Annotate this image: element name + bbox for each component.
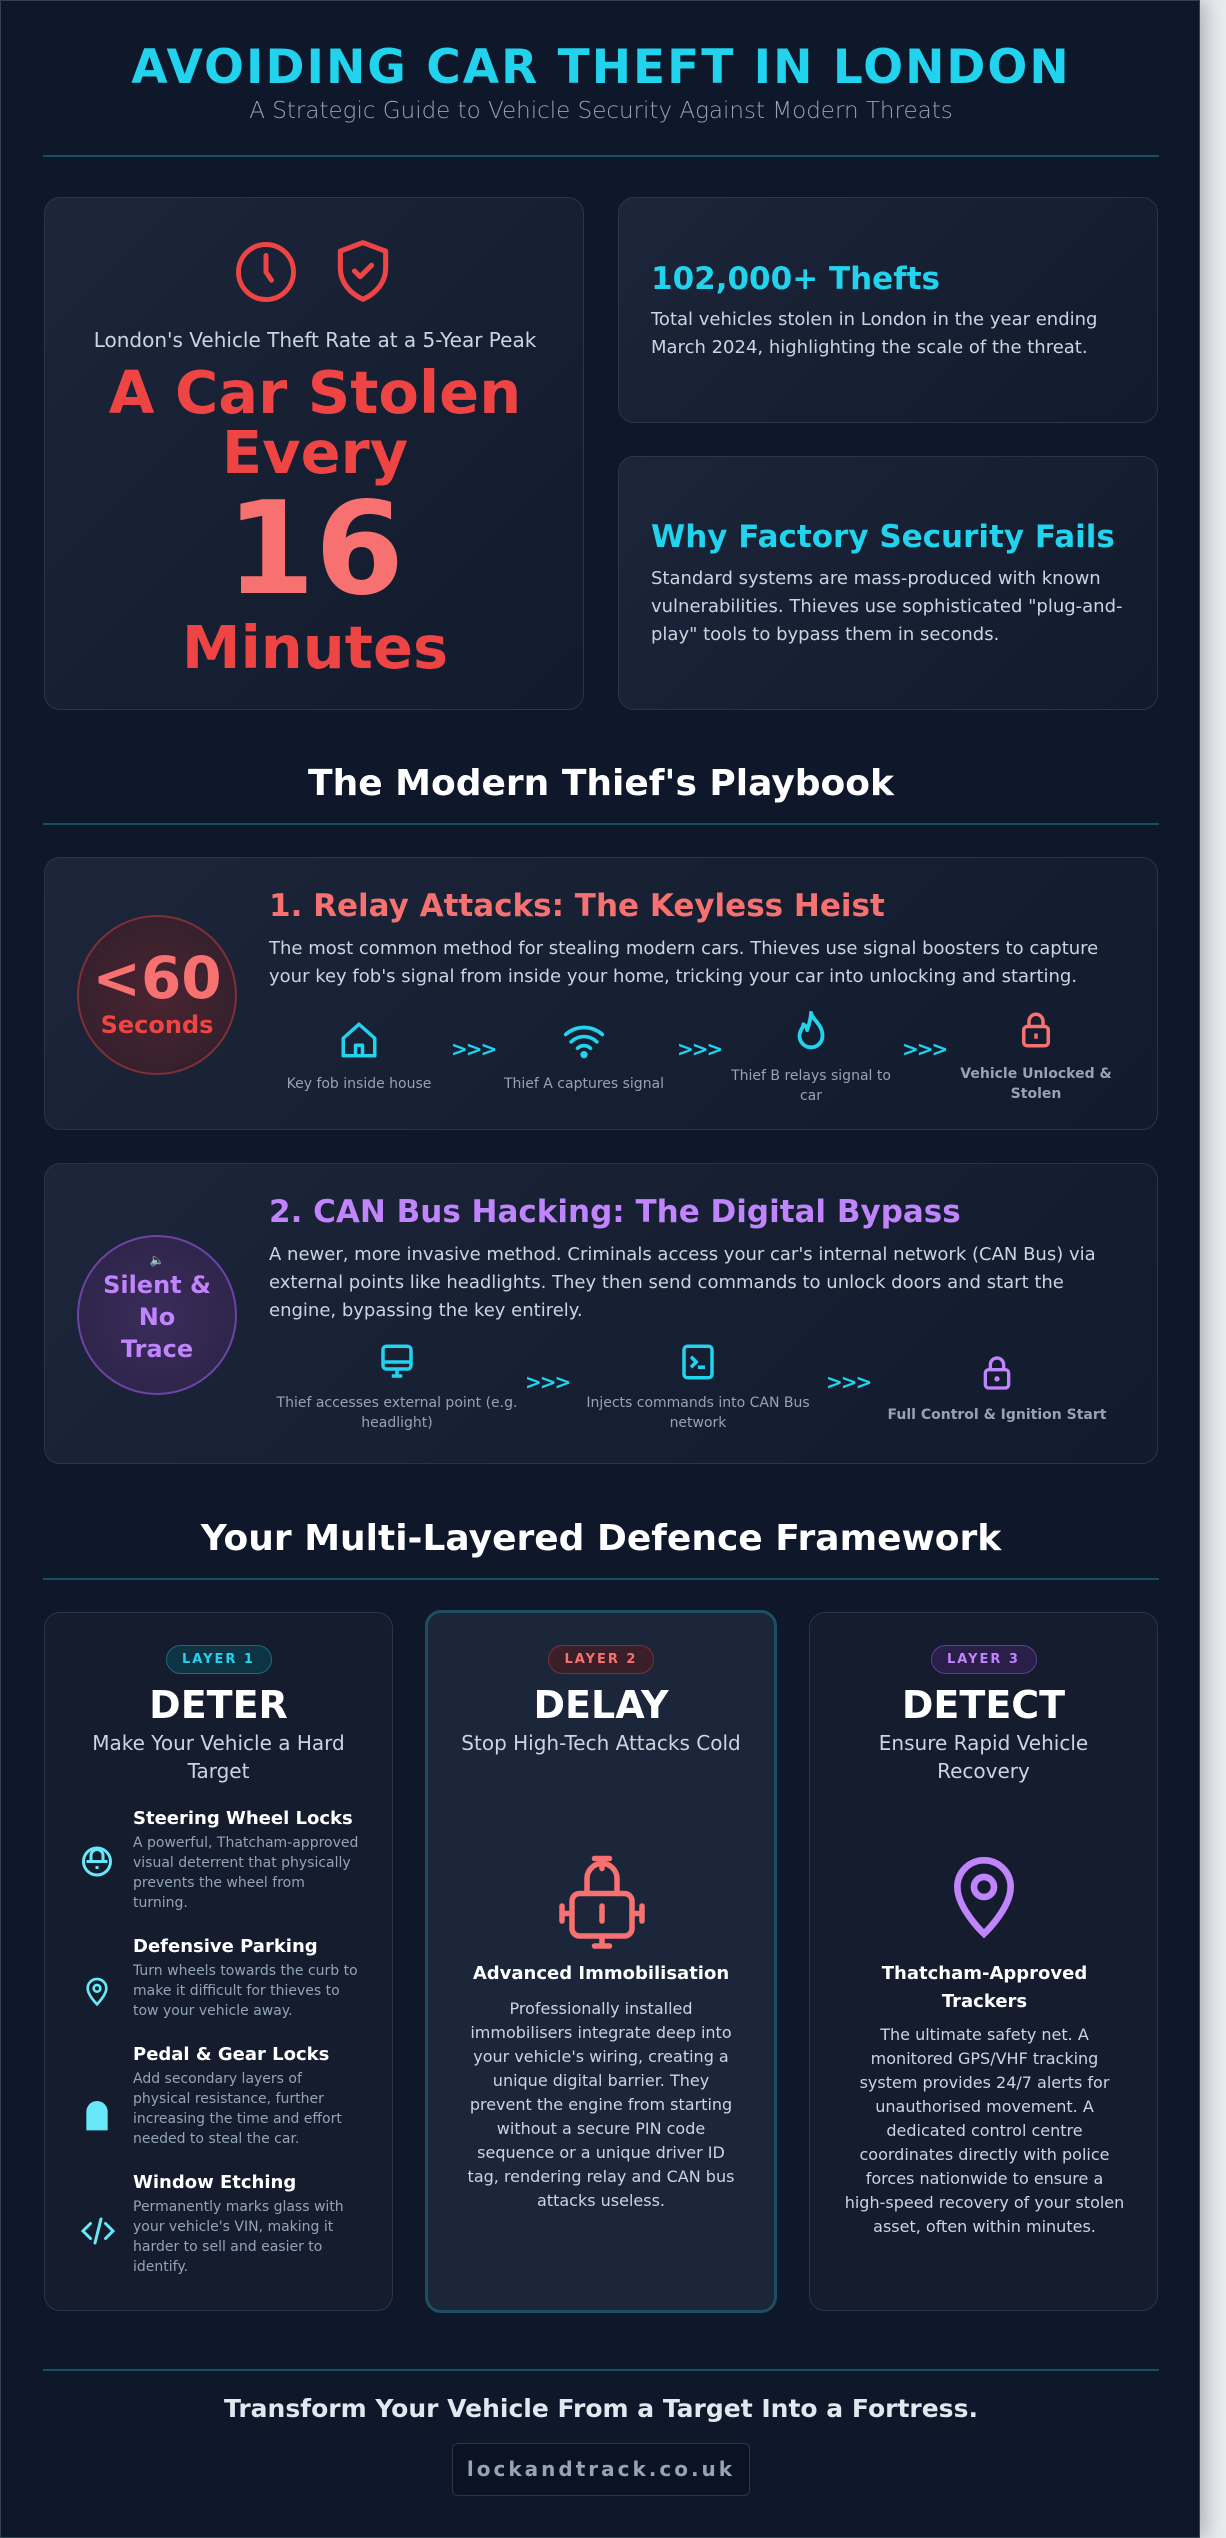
badge: silent: 🔈 [150,1253,164,1267]
badge: <60 seconds: Seconds [101,1011,213,1039]
flow step: control: Full Control & Ignition Start [888,1407,1106,1423]
panel: CAN bus [44,1163,1158,1464]
item: window etching: Permanently marks glass with your vehicle's VIN, making it harder to sell and easier to identify. [133,2199,344,2275]
subtitle: A Strategic Guide to Vehicle Security Against Modern Threats [249,98,953,124]
panel: layer 2 delay [425,1610,777,2313]
flow step: wifi: Thief A captures signal [504,1076,664,1092]
item: pedal locks: Pedal & Gear Locks [133,2044,329,2065]
flow step: access [276,1344,517,1431]
footer button: lockandtrack.co.uk [467,2457,735,2481]
item: steering lock: Steering Wheel Locks [133,1808,353,1829]
text: Total vehicles stolen in London in the year ending March 2024, highlighting the scale of the threat. [651,309,1097,358]
text: headline stat [109,358,521,682]
item: pedal locks: Add secondary layers of physical resistance, further increasing the time and effort needed to steal the car. [133,2071,342,2147]
text: immobilisation: Advanced Immobilisation [473,1963,729,1984]
badge [930,1645,1036,1674]
text: peak: London's Vehicle Theft Rate at a 5-Year Peak [94,328,536,352]
flow step: relay: Thief B relays signal to car [731,1068,891,1104]
icon: shield [338,240,388,302]
badge: silent: Silent & [103,1271,211,1299]
text: headline stat: Minutes [182,613,448,682]
icon: pin [86,1978,108,2006]
item: steering lock: A powerful, Thatcham-approved visual deterrent that physically prevents the wheel from turning. [133,1835,358,1911]
text: Standard systems are mass-produced with known vulnerabilities. Thieves use sophisticated "plug-and-play" tools to bypass them in seconds. [651,568,1123,645]
flow step: relay [731,1010,891,1104]
text: The most common method for stealing modern cars. Thieves use signal boosters to capture your key fob's signal from inside your home, tricking your car into unlocking and starting. [269,938,1098,987]
item: defensive parking [132,1936,358,2019]
icon: bell shape [86,2101,108,2130]
badge: LAYER 2 [564,1652,637,1667]
arrow: >>> [677,1037,721,1061]
subheading: Ensure Rapid Vehicle Recovery [879,1731,1088,1783]
flow step: house [287,1022,431,1092]
arrow: >>> [826,1370,870,1394]
heading: Why Factory Security Fails [651,519,1115,555]
arrow: >>> [902,1037,946,1061]
panel: layer 3 detect: The ultimate safety net. A monitored GPS/VHF tracking system provides 24/7 alerts for unauthorised movement. A dedicated control centre coordinates directly with police forces nationwide to ensure a high‑speed recovery of your stolen asset, often within minutes. [845,2025,1124,2236]
heading: defence framework: Your Multi-Layered Defence Framework [201,1518,1001,1559]
heading: DETECT [902,1683,1065,1727]
text: headline stat: 16 [226,475,404,624]
panel: layer 1 deter [44,1612,393,2311]
heading: 2. CAN Bus Hacking: The Digital Bypass [269,1194,961,1230]
icon: immobiliser lock [559,1856,645,1949]
heading: DELAY [533,1683,668,1727]
flow step: unlocked: Vehicle Unlocked & Stolen [960,1066,1112,1102]
flow step: control [888,1356,1106,1423]
badge: LAYER 1 [182,1652,255,1667]
title: AVOIDING CAR THEFT IN LONDON [131,40,1071,95]
footer button [452,2443,750,2496]
icon: lock [82,1846,112,1876]
flow step: inject: Injects commands into CAN Bus network [586,1395,810,1431]
badge: <60 seconds [77,915,237,1075]
badge [548,1645,654,1674]
panel: factory security [618,456,1158,710]
badge: LAYER 3 [947,1652,1020,1667]
text: headline stat: A Car Stolen [109,358,521,427]
arrow: >>> [525,1370,569,1394]
icon: code [81,2218,115,2244]
subheading: Make Your Vehicle a Hard Target [92,1731,345,1783]
icon: clock [236,242,296,302]
panel: layer 2 delay: Professionally installed immobilisers integrate deep into your vehicle's wiring, creating a unique digital barrier. They prevent the engine from starting without a secure PIN code sequence or a unique driver ID tag, rendering relay and CAN bus attacks useless. [468,1999,734,2210]
item: window etching: Window Etching [133,2172,296,2193]
text: headline stat: Every [222,418,408,487]
footer tagline: Transform Your Vehicle From a Target Into a Fortress. [224,2394,978,2423]
flow step: access: Thief accesses external point (e.g. headlight) [277,1395,517,1431]
item: defensive parking: Defensive Parking [133,1936,318,1957]
flow step: unlocked [960,1012,1112,1102]
heading: 1. Relay Attacks: The Keyless Heist [269,888,885,924]
panel: relay attacks [44,857,1158,1130]
heading: 102,000: 102,000+ Thefts [651,261,940,297]
text: A newer, more invasive method. Criminals access your car's internal network (CAN Bus) via external points like headlights. They then send commands to unlock doors and start the engine, bypassing the key entirely. [269,1244,1096,1321]
subheading: Stop High-Tech Attacks Cold [461,1731,741,1755]
item: defensive parking: Turn wheels towards the curb to make it difficult for thieves to tow your vehicle away. [133,1963,358,2019]
flow step: house: Key fob inside house [287,1076,431,1092]
panel: thefts stat [618,197,1158,423]
badge [166,1645,272,1674]
flow step: inject [586,1344,810,1431]
panel: stat headline [44,197,584,710]
badge: <60 seconds: <60 [92,944,222,1012]
panel: layer 3 detect [809,1612,1158,2311]
badge: silent: No [139,1303,175,1331]
badge: silent: Trace [121,1335,193,1363]
heading: DETER [149,1683,288,1727]
flow step: wifi [504,1026,664,1092]
arrow: >>> [451,1037,495,1061]
text: trackers: Thatcham-Approved Trackers [882,1963,1087,2012]
badge: silent [77,1235,237,1395]
heading: playbook: The Modern Thief's Playbook [308,763,894,804]
icon: pin [954,1857,1014,1938]
